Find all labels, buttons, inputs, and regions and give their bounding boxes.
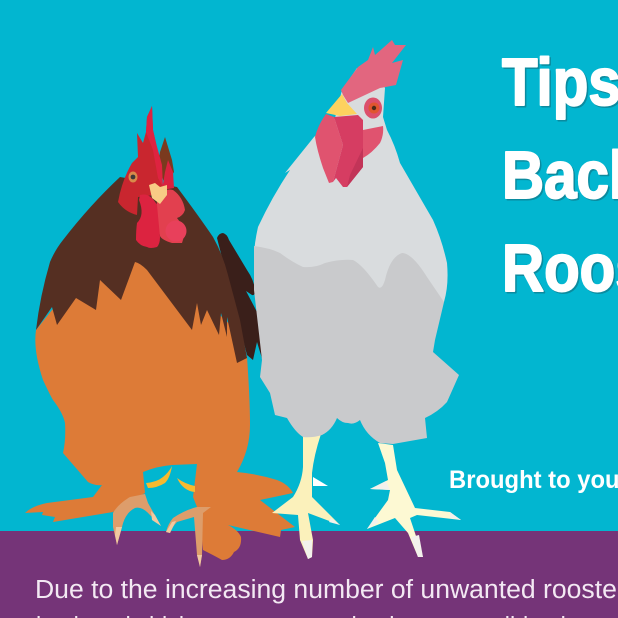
rooster far cheek: [162, 160, 174, 190]
hen wattle shading: [347, 148, 363, 187]
title: [502, 45, 618, 307]
hen yellow beak: [326, 94, 357, 116]
hen pink comb: [341, 40, 406, 103]
rooster dark wing: [217, 233, 264, 365]
illustration: white hen: [254, 40, 461, 559]
rooster brown neck feathers: [36, 177, 247, 363]
intro text: Due to the increasing number of unwanted roosters: [35, 576, 618, 604]
panel: purple intro band: [0, 531, 618, 618]
hen left spur: [313, 477, 328, 486]
intro text: [35, 576, 618, 618]
rooster eye: [128, 172, 138, 182]
hen eye: [364, 98, 382, 118]
hen light body and neck: [254, 68, 448, 302]
rooster claw tips: [115, 511, 202, 567]
rooster red wattle: [136, 194, 160, 248]
hen left leg: [272, 434, 340, 559]
hen right wattle: [333, 115, 363, 187]
rooster pink wattle: [155, 190, 186, 243]
rooster beak: [149, 183, 167, 204]
hen toe tips: [302, 481, 461, 559]
rooster back comb: [158, 137, 174, 185]
hen far wattle: [363, 126, 383, 158]
hen left wattle: [315, 114, 343, 183]
illustration: brown and orange rooster: [25, 106, 295, 567]
rooster right claw: [166, 507, 211, 567]
hen right leg: [367, 443, 461, 557]
rooster comb highlight: [146, 106, 163, 187]
rooster comb and head: [118, 106, 163, 215]
hen grey lower body: [254, 246, 459, 444]
rooster left claw: [113, 494, 161, 545]
rooster yellow leg bands: [146, 466, 195, 492]
rooster orange body and feet: [25, 250, 295, 560]
rooster wattle lobe: [166, 220, 186, 242]
